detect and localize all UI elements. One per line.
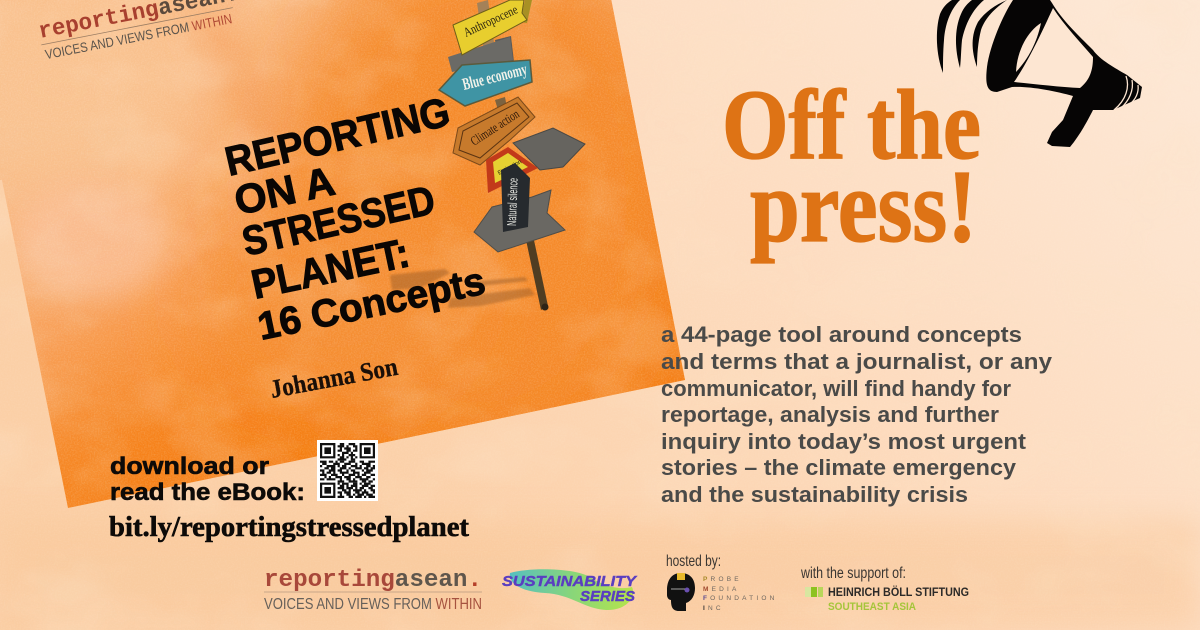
logo: Sustainability Series: SUSTAINABILITY (502, 573, 638, 590)
logo: hosted by Probe Media Foundation (666, 553, 778, 612)
logo: reportingasean footer (264, 567, 482, 613)
book title: PLANET: (247, 230, 413, 308)
illustration: signpost: Extinction (497, 159, 523, 177)
text: download call to action: read the eBook: (110, 479, 305, 506)
text: download call to action: download or (110, 453, 269, 480)
text block: book description: stories – the climate emergency (661, 455, 1017, 480)
illustration: signpost: Climate action (467, 106, 522, 149)
QR code (317, 440, 378, 501)
logo: hosted by Probe Media Foundation: hosted by: (666, 553, 721, 570)
logo: hosted by Probe Media Foundation: FOUNDATION (703, 595, 778, 602)
book title: REPORTING (221, 88, 454, 185)
logo: hosted by Probe Media Foundation: MEDIA (703, 586, 740, 593)
text block: book description: communicator, will find handy for (661, 376, 1011, 401)
text: download call to action (110, 453, 305, 506)
heading: Off the press!: Off the (722, 69, 981, 180)
book title: 16 Concepts (254, 260, 489, 349)
text block: book description: and the sustainability crisis (661, 482, 968, 507)
book title: STRESSED (238, 176, 439, 265)
logo: Heinrich Boll Stiftung: HEINRICH BÖLL STIFTUNG (828, 584, 969, 599)
logo: hosted by Probe Media Foundation: PROBE (703, 576, 742, 583)
text block: book description: reportage, analysis and further (661, 402, 999, 427)
icon: megaphone (937, 0, 1142, 147)
logo: Heinrich Boll Stiftung (800, 565, 969, 613)
book title (221, 88, 489, 349)
text block: book description: and terms that a journalist, or any (661, 349, 1053, 374)
illustration: signpost: Natural silence (504, 178, 521, 226)
logo: reportingasean footer: VOICES AND VIEWS FROM WITHIN (264, 596, 482, 613)
text block: book description: inquiry into today’s most urgent (661, 429, 1027, 454)
illustration: signpost: Blue economy (460, 59, 529, 94)
text block: book description (661, 322, 1053, 507)
panel: tilted orange book cover (0, 0, 700, 518)
text block: book description: a 44-page tool around concepts (661, 322, 1022, 347)
shadow smear behind title (390, 269, 535, 308)
icon: head (667, 573, 695, 611)
logo: reportingasean on cover: VOICES AND VIEWS FROM WITHIN (44, 11, 233, 62)
heading: Off the press!: press! (750, 149, 977, 264)
author name: Johanna Son (268, 352, 400, 404)
logo: Heinrich Boll Stiftung: SOUTHEAST ASIA (828, 601, 916, 613)
heading: Off the press! (722, 69, 981, 264)
text: bit.ly link: bit.ly/reportingstressedplanet (109, 511, 469, 543)
logo: hosted by Probe Media Foundation: INC (703, 605, 724, 612)
book title: ON A (230, 158, 339, 224)
logo: Heinrich Boll Stiftung: with the support of: (800, 565, 906, 582)
logo: reportingasean footer: reportingasean. (264, 567, 482, 594)
illustration: signpost (439, 0, 585, 310)
logo: Sustainability Series (502, 569, 638, 610)
logo: Sustainability Series: SERIES (580, 588, 635, 605)
